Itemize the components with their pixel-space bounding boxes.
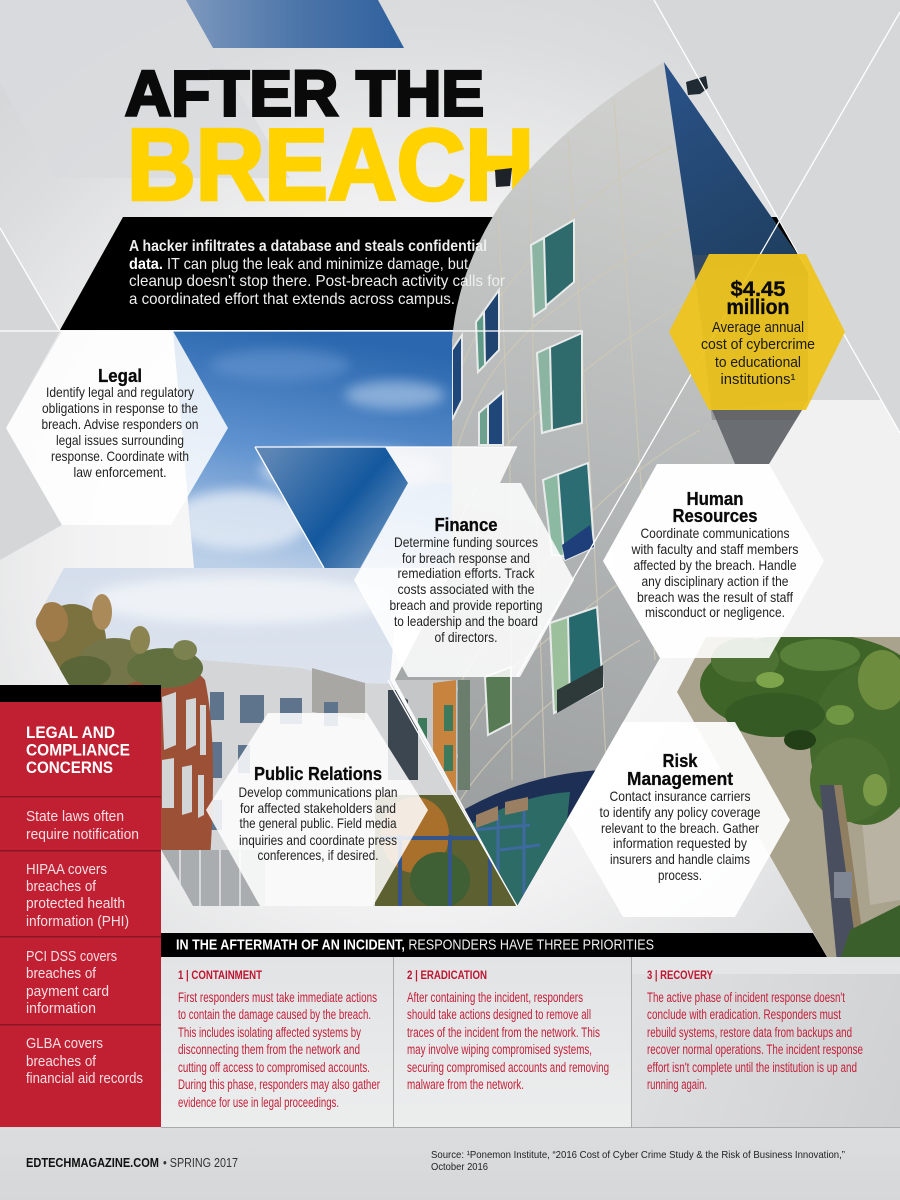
item: HIPAA: HIPAA covers bbox=[26, 861, 107, 878]
white outline lines bbox=[0, 0, 900, 906]
footer issue: • SPRING 2017 bbox=[163, 1156, 238, 1170]
black heading bar: IN THE AFTERMATH OF AN INCIDENT, RESPONDERS HAVE THREE PRIORITIES bbox=[176, 938, 654, 954]
intro text bbox=[129, 238, 506, 308]
column: eradication: malware from the network. bbox=[407, 1077, 524, 1092]
hexagon: public relations: Develop communications plan bbox=[238, 784, 398, 800]
hexagon: risk management: Management bbox=[627, 769, 733, 789]
hexagon: human resources bbox=[603, 464, 824, 658]
column: eradication: may involve wiping compromised systems, bbox=[407, 1042, 592, 1057]
stat hexagon: cost of cybercrime: to educational bbox=[715, 355, 801, 371]
stat hexagon: cost of cybercrime: $4.45 bbox=[730, 278, 786, 301]
orange tree and gate bbox=[375, 795, 516, 906]
hexagon: finance: Finance bbox=[434, 515, 498, 535]
column: eradication: After containing the incident, responders bbox=[407, 990, 583, 1005]
item: HIPAA: information (PHI) bbox=[26, 913, 129, 930]
hexagon: finance: remediation efforts. Track bbox=[398, 565, 535, 581]
item: PCI DSS: PCI DSS covers bbox=[26, 948, 117, 965]
right tree photo bbox=[677, 637, 900, 957]
source note: Source: ¹Ponemon Institute, “2016 Cost of Cyber Crime Study & the Risk of Business Innovation,” bbox=[431, 1149, 845, 1161]
blue parallelogram at top bbox=[186, 0, 404, 48]
hexagon: risk management: information requested by bbox=[613, 835, 747, 851]
hexagon: human resources: Human bbox=[686, 489, 744, 509]
item: PCI DSS: payment card bbox=[26, 983, 109, 1000]
item: PCI DSS: information bbox=[26, 1000, 96, 1017]
item: state laws: State laws often bbox=[26, 808, 124, 825]
hexagon: public relations: for affected stakeholders and bbox=[240, 800, 396, 816]
brick round building bbox=[100, 675, 214, 860]
panel seams bbox=[452, 100, 700, 810]
column: containment bbox=[178, 970, 380, 1110]
white building windows bbox=[210, 692, 338, 830]
tree foliage bbox=[700, 633, 900, 825]
column: recovery bbox=[647, 970, 863, 1092]
sky photo panel bbox=[173, 332, 453, 568]
column: containment: cutting off access to compromised accounts. bbox=[178, 1060, 370, 1075]
building roof lamps bbox=[495, 76, 708, 187]
hexagon: legal: breach. Advise responders on bbox=[42, 416, 198, 432]
building face bbox=[395, 62, 797, 905]
hexagon: legal: obligations in response to the bbox=[42, 400, 198, 416]
panel heading: COMPLIANCE bbox=[26, 740, 130, 760]
column: containment: First responders must take immediate actions bbox=[178, 990, 377, 1005]
hexagon: legal: legal issues surrounding bbox=[56, 432, 184, 448]
source note: October 2016 bbox=[431, 1161, 488, 1173]
column: eradication bbox=[407, 970, 609, 1092]
orange tower and rear building bbox=[396, 680, 457, 794]
stat hexagon: cost of cybercrime bbox=[669, 254, 845, 410]
windows bbox=[452, 220, 603, 735]
column: recovery: running again. bbox=[647, 1077, 707, 1092]
column: eradication: securing compromised accounts and removing bbox=[407, 1060, 609, 1075]
item: state laws bbox=[26, 808, 139, 843]
item: PCI DSS: breaches of bbox=[26, 965, 97, 982]
hexagon: risk management: insurers and handle claims bbox=[610, 851, 750, 867]
hexagon: finance: breach and provide reporting bbox=[390, 597, 542, 613]
intro black banner bbox=[60, 217, 800, 330]
hexagon: legal bbox=[6, 331, 228, 525]
hexagon: risk management: process. bbox=[658, 867, 702, 883]
source note bbox=[431, 1149, 845, 1173]
hexagon: risk management: Contact insurance carriers bbox=[610, 788, 750, 804]
hexagon: public relations: conferences, if desired. bbox=[258, 847, 378, 863]
column: eradication: 2 | ERADICATION bbox=[407, 970, 487, 982]
footer bbox=[0, 1128, 900, 1200]
grass bbox=[841, 905, 900, 957]
hexagon: human resources: breach was the result of staff bbox=[637, 589, 793, 605]
column: recovery: 3 | RECOVERY bbox=[647, 970, 713, 982]
hexagon: finance: of directors. bbox=[434, 629, 498, 645]
dark blue triangle panel bbox=[255, 447, 517, 568]
hexagon: public relations: Public Relations bbox=[254, 764, 382, 784]
title bbox=[125, 58, 534, 222]
column: containment: This includes isolating affected systems by bbox=[178, 1025, 361, 1040]
intro text: cleanup doesn't stop there. Post-breach activity calls for bbox=[129, 273, 506, 290]
tree top-left bbox=[36, 594, 203, 688]
item: GLBA: breaches of bbox=[26, 1053, 97, 1070]
panel: legal and compliance concerns bbox=[0, 685, 161, 1127]
stat hexagon: cost of cybercrime: cost of cybercrime bbox=[701, 337, 815, 353]
intro text: a coordinated effort that extends across campus. bbox=[129, 291, 455, 308]
walkway pole bbox=[820, 785, 854, 957]
item: GLBA: financial aid records bbox=[26, 1070, 143, 1087]
panel heading bbox=[26, 723, 130, 777]
grey curved building bbox=[200, 660, 454, 906]
black heading bar bbox=[161, 933, 827, 957]
column: containment: During this phase, responders may also gather bbox=[178, 1077, 380, 1092]
hexagon: legal: Legal bbox=[98, 366, 142, 386]
hexagon: human resources: Resources bbox=[672, 506, 758, 526]
column: containment: disconnecting them from the network and bbox=[178, 1042, 360, 1057]
hexagon: finance: Determine funding sources bbox=[394, 534, 538, 550]
blue glass bbox=[664, 62, 797, 268]
title line: after the: AFTER THE bbox=[125, 58, 484, 130]
panel heading: CONCERNS bbox=[26, 758, 113, 777]
hexagon: public relations bbox=[206, 713, 428, 906]
hexagon: legal: response. Coordinate with bbox=[51, 448, 189, 464]
stat hexagon: cost of cybercrime: Average annual bbox=[712, 320, 804, 336]
shadow side under yellow hex bbox=[770, 410, 802, 463]
hexagon: legal: Identify legal and regulatory bbox=[46, 384, 194, 400]
hexagon: finance: to leadership and the board bbox=[394, 613, 538, 629]
hexagon: human resources: Coordinate communications bbox=[640, 525, 790, 541]
item: PCI DSS bbox=[26, 948, 117, 1017]
item: HIPAA bbox=[26, 861, 129, 930]
stat hexagon: cost of cybercrime: million bbox=[726, 296, 790, 319]
hexagon: risk management bbox=[567, 722, 790, 917]
hexagon: human resources: misconduct or negligence. bbox=[645, 604, 785, 620]
hexagon: risk management: Risk bbox=[662, 751, 698, 771]
column: containment: to contain the damage caused by the breach. bbox=[178, 1007, 371, 1022]
column: eradication: traces of the incident from the network. This bbox=[407, 1025, 600, 1040]
stat hexagon: cost of cybercrime: institutions¹ bbox=[720, 372, 796, 388]
hexagon: finance: costs associated with the bbox=[398, 581, 535, 597]
item: HIPAA: breaches of bbox=[26, 878, 97, 895]
background geometric panels bbox=[0, 0, 900, 637]
intro text: data. IT can plug the leak and minimize damage, but bbox=[129, 256, 468, 273]
hexagon: legal: law enforcement. bbox=[74, 464, 166, 480]
intro text: A hacker infiltrates a database and steals confidential bbox=[129, 238, 487, 255]
column: containment: evidence for use in legal proceedings. bbox=[178, 1095, 339, 1110]
hexagon: risk management: relevant to the breach. Gather bbox=[601, 820, 759, 836]
hexagon: public relations: inquiries and coordinate press bbox=[239, 832, 397, 848]
ground floor glazing bbox=[464, 770, 596, 905]
hexagon: human resources: any disciplinary action if the bbox=[642, 573, 789, 589]
panel heading: LEGAL AND bbox=[26, 723, 115, 742]
hexagon: human resources: with faculty and staff members bbox=[631, 541, 798, 557]
item: HIPAA: protected health bbox=[26, 895, 125, 912]
footer publication name: EDTECHMAGAZINE.COM bbox=[26, 1156, 159, 1170]
hexagon: finance: for breach response and bbox=[402, 550, 530, 566]
panel: three priorities bbox=[161, 933, 900, 1128]
hexagon: risk management: to identify any policy coverage bbox=[600, 804, 761, 820]
hexagon: public relations: the general public. Field media bbox=[240, 815, 397, 831]
hexagon: finance bbox=[354, 483, 574, 677]
title line: breach: BREACH bbox=[127, 110, 534, 222]
item: GLBA bbox=[26, 1035, 143, 1087]
column: containment: 1 | CONTAINMENT bbox=[178, 970, 262, 982]
column: eradication: should take actions designed to remove all bbox=[407, 1007, 591, 1022]
item: GLBA: GLBA covers bbox=[26, 1035, 103, 1052]
hexagon: human resources: affected by the breach. Handle bbox=[634, 557, 797, 573]
item: state laws: require notification bbox=[26, 826, 139, 843]
campus photo panel bbox=[30, 568, 535, 908]
building photo bbox=[380, 50, 820, 920]
glass fence bbox=[160, 850, 265, 906]
